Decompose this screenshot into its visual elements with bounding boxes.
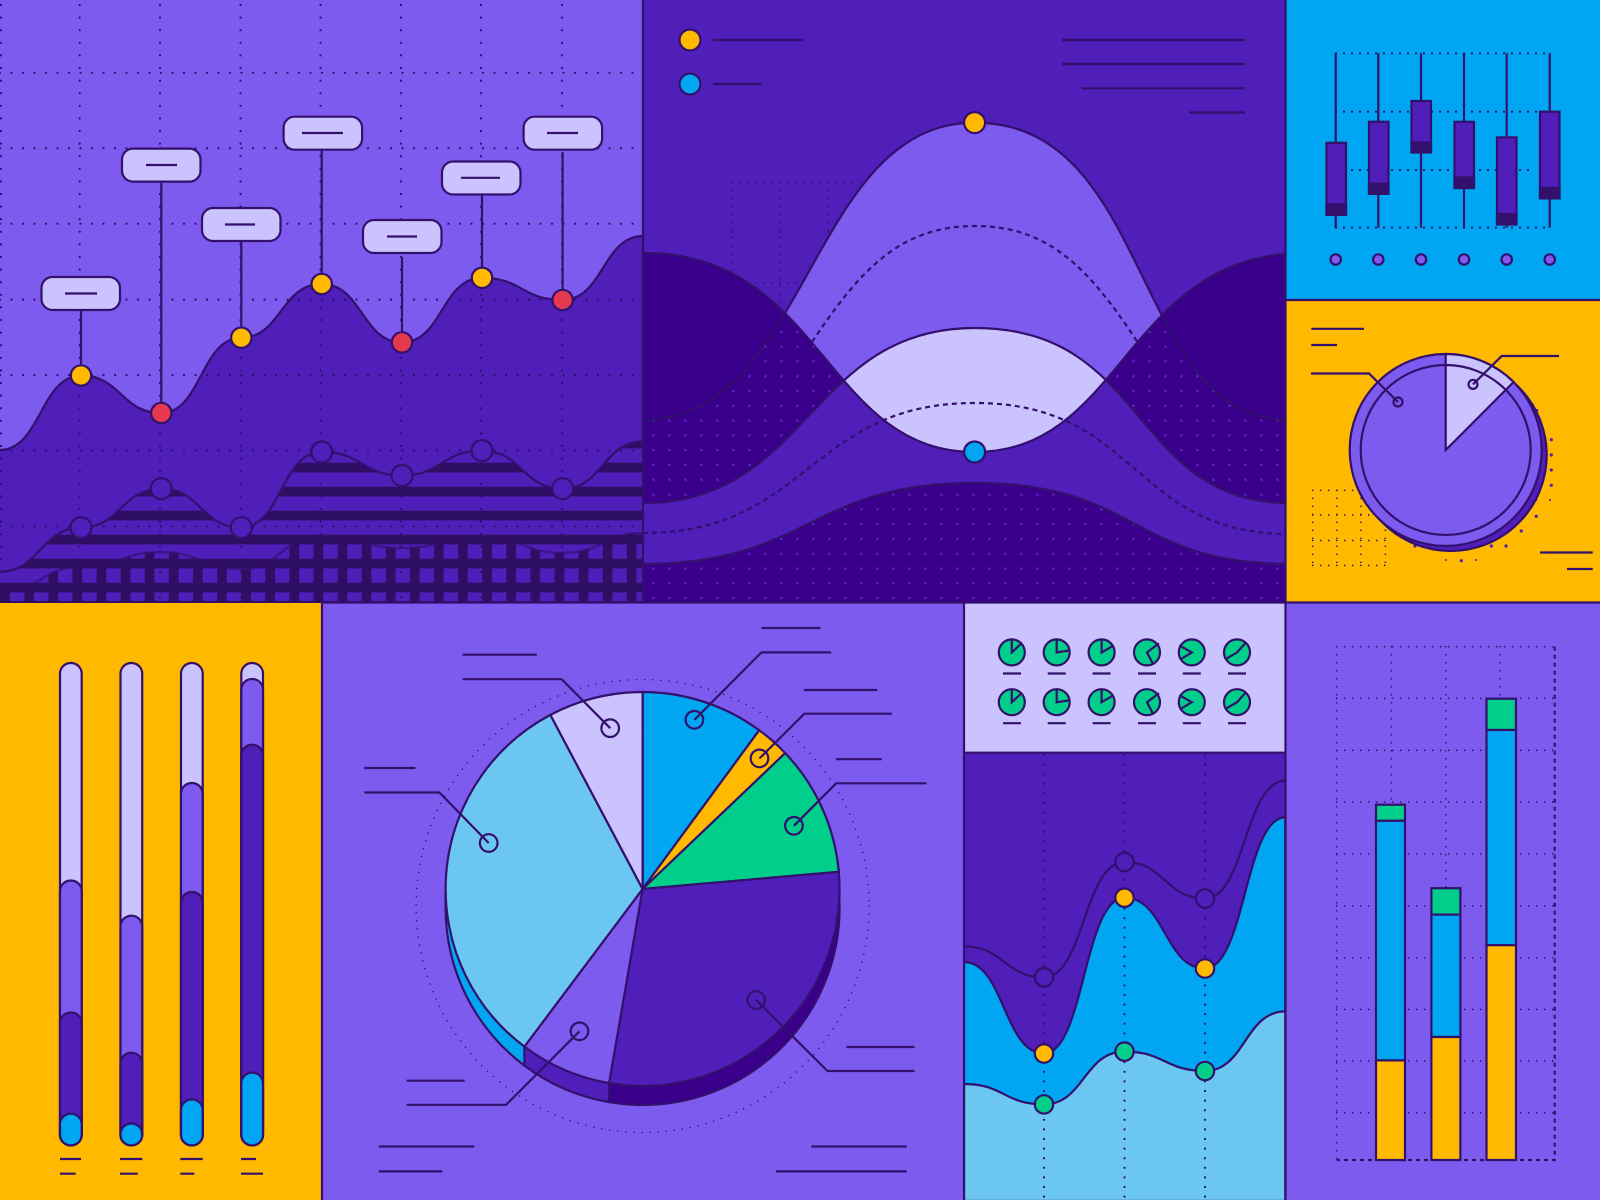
candles [1326,101,1560,224]
callout labels [42,117,602,310]
panel: gauge pie on yellow [1285,300,1600,602]
panel: stacked column chart [1286,603,1600,1200]
markers blue curve [1035,888,1214,1063]
panel: bell curve overlap chart [643,0,1306,603]
column 2 [1431,888,1460,1160]
column 3 [1486,699,1516,1160]
candle axis dots [1330,254,1555,265]
blue area [965,816,1284,1103]
panel: multi-line area chart with callouts [0,0,643,603]
bar 1 [60,663,82,1145]
lower dotted hill [643,483,1290,603]
dashed curves [643,226,1290,534]
markers on lower curve [70,440,573,538]
dark side lobes [644,254,1284,502]
panel: small pie icons [964,603,1285,753]
lavender centre fill [845,329,1104,450]
light blue area [964,1011,1285,1200]
callout stems [81,149,563,413]
markers on main curve [71,268,573,423]
pie depth [446,872,840,1105]
pie callouts [364,628,926,1105]
panel: candlestick chart [1285,0,1600,300]
striped lower area [0,442,642,593]
highlighted wedge [1446,354,1514,450]
chequered lowest area [0,533,637,601]
bar captions [60,1159,263,1174]
trough marker [964,442,985,462]
curve outlines [643,123,1306,564]
bar 2 [120,663,142,1145]
pie shadow [1355,359,1547,551]
panel: large pie chart [322,603,964,1200]
main dark area [0,236,643,603]
scattered dots [1413,409,1553,562]
panel: stacked vertical pill bars [0,603,322,1200]
pie disc [1350,354,1542,546]
bar 4 [241,663,263,1145]
legend [680,30,803,94]
column 1 [1376,805,1405,1160]
middle band [644,382,1284,563]
markers top curve [1035,853,1214,986]
pie top face sectors [446,692,840,1086]
footer lines [379,1146,907,1171]
icon row 2 [999,689,1250,715]
top curve [964,781,1285,977]
markers light blue curve [1035,1042,1214,1114]
icon row 1 [999,639,1250,665]
text placeholder lines [1062,40,1245,112]
icon captions [1003,674,1246,723]
panel: layered area chart [964,753,1285,1200]
upper bell fill [786,124,1160,379]
peak marker [964,112,985,133]
bar 3 [181,663,203,1145]
text lines and callouts [1311,329,1593,569]
